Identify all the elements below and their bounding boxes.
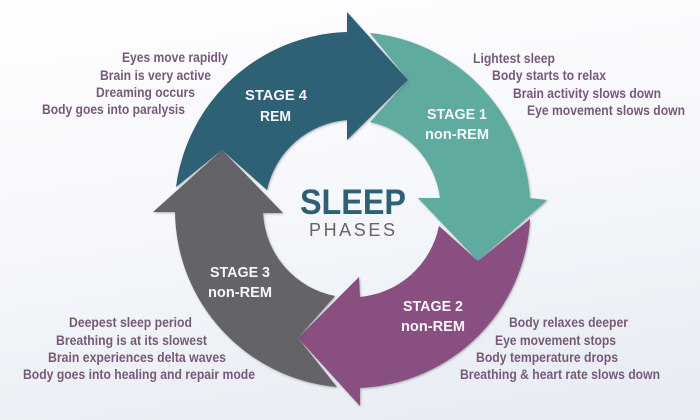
text block: stage 1 details: Brain activity slows down (513, 86, 661, 101)
arrow: stage 4 (176, 12, 408, 190)
label: stage 2: STAGE 2 (403, 298, 463, 315)
label: stage 4: REM (260, 108, 291, 125)
text block: stage 2 details: Eye movement stops (495, 333, 616, 348)
text block: stage 4 details (42, 50, 228, 117)
text block: stage 4 details: Dreaming occurs (96, 85, 195, 100)
text block: stage 2 details (460, 315, 660, 382)
text block: stage 1 details: Lightest sleep (473, 51, 555, 66)
text block: stage 1 details: Eye movement slows down (527, 103, 685, 118)
label: stage 1: STAGE 1 (427, 106, 487, 123)
label: stage 3 (208, 264, 272, 301)
text block: stage 4 details: Body goes into paralysis (42, 102, 185, 117)
text block: stage 2 details: Breathing & heart rate slows down (460, 367, 660, 382)
text block: stage 2 details: Body relaxes deeper (509, 315, 629, 330)
text block: stage 4 details: Eyes move rapidly (122, 50, 228, 65)
text block: stage 3 details: Breathing is at its slowest (56, 333, 207, 348)
label: stage 1 (425, 106, 489, 143)
text block: stage 3 details (23, 315, 255, 382)
text block: stage 2 details: Body temperature drops (476, 350, 618, 365)
arrow: stage 2 (298, 219, 530, 406)
label: stage 4 (245, 87, 308, 125)
arrow: stage 1 (370, 33, 547, 261)
text block: stage 3 details: Deepest sleep period (69, 315, 192, 330)
label: stage 2 (401, 298, 465, 335)
label: stage 4: STAGE 4 (245, 87, 308, 104)
title: sleep phases: PHASES (309, 220, 395, 240)
label: stage 3: STAGE 3 (210, 264, 270, 281)
arrow: stage 3 (153, 150, 337, 387)
text block: stage 3 details: Body goes into healing and repair mode (23, 367, 255, 382)
label: stage 2: non-REM (401, 318, 465, 335)
label: stage 3: non-REM (208, 284, 272, 301)
text block: stage 4 details: Brain is very active (100, 68, 211, 83)
label: stage 1: non-REM (425, 126, 489, 143)
text block: stage 3 details: Brain experiences delta waves (48, 350, 226, 365)
text block: stage 1 details (473, 51, 685, 118)
title: sleep phases (300, 183, 406, 240)
title: sleep phases: SLEEP (300, 183, 406, 222)
text block: stage 1 details: Body starts to relax (492, 68, 606, 83)
